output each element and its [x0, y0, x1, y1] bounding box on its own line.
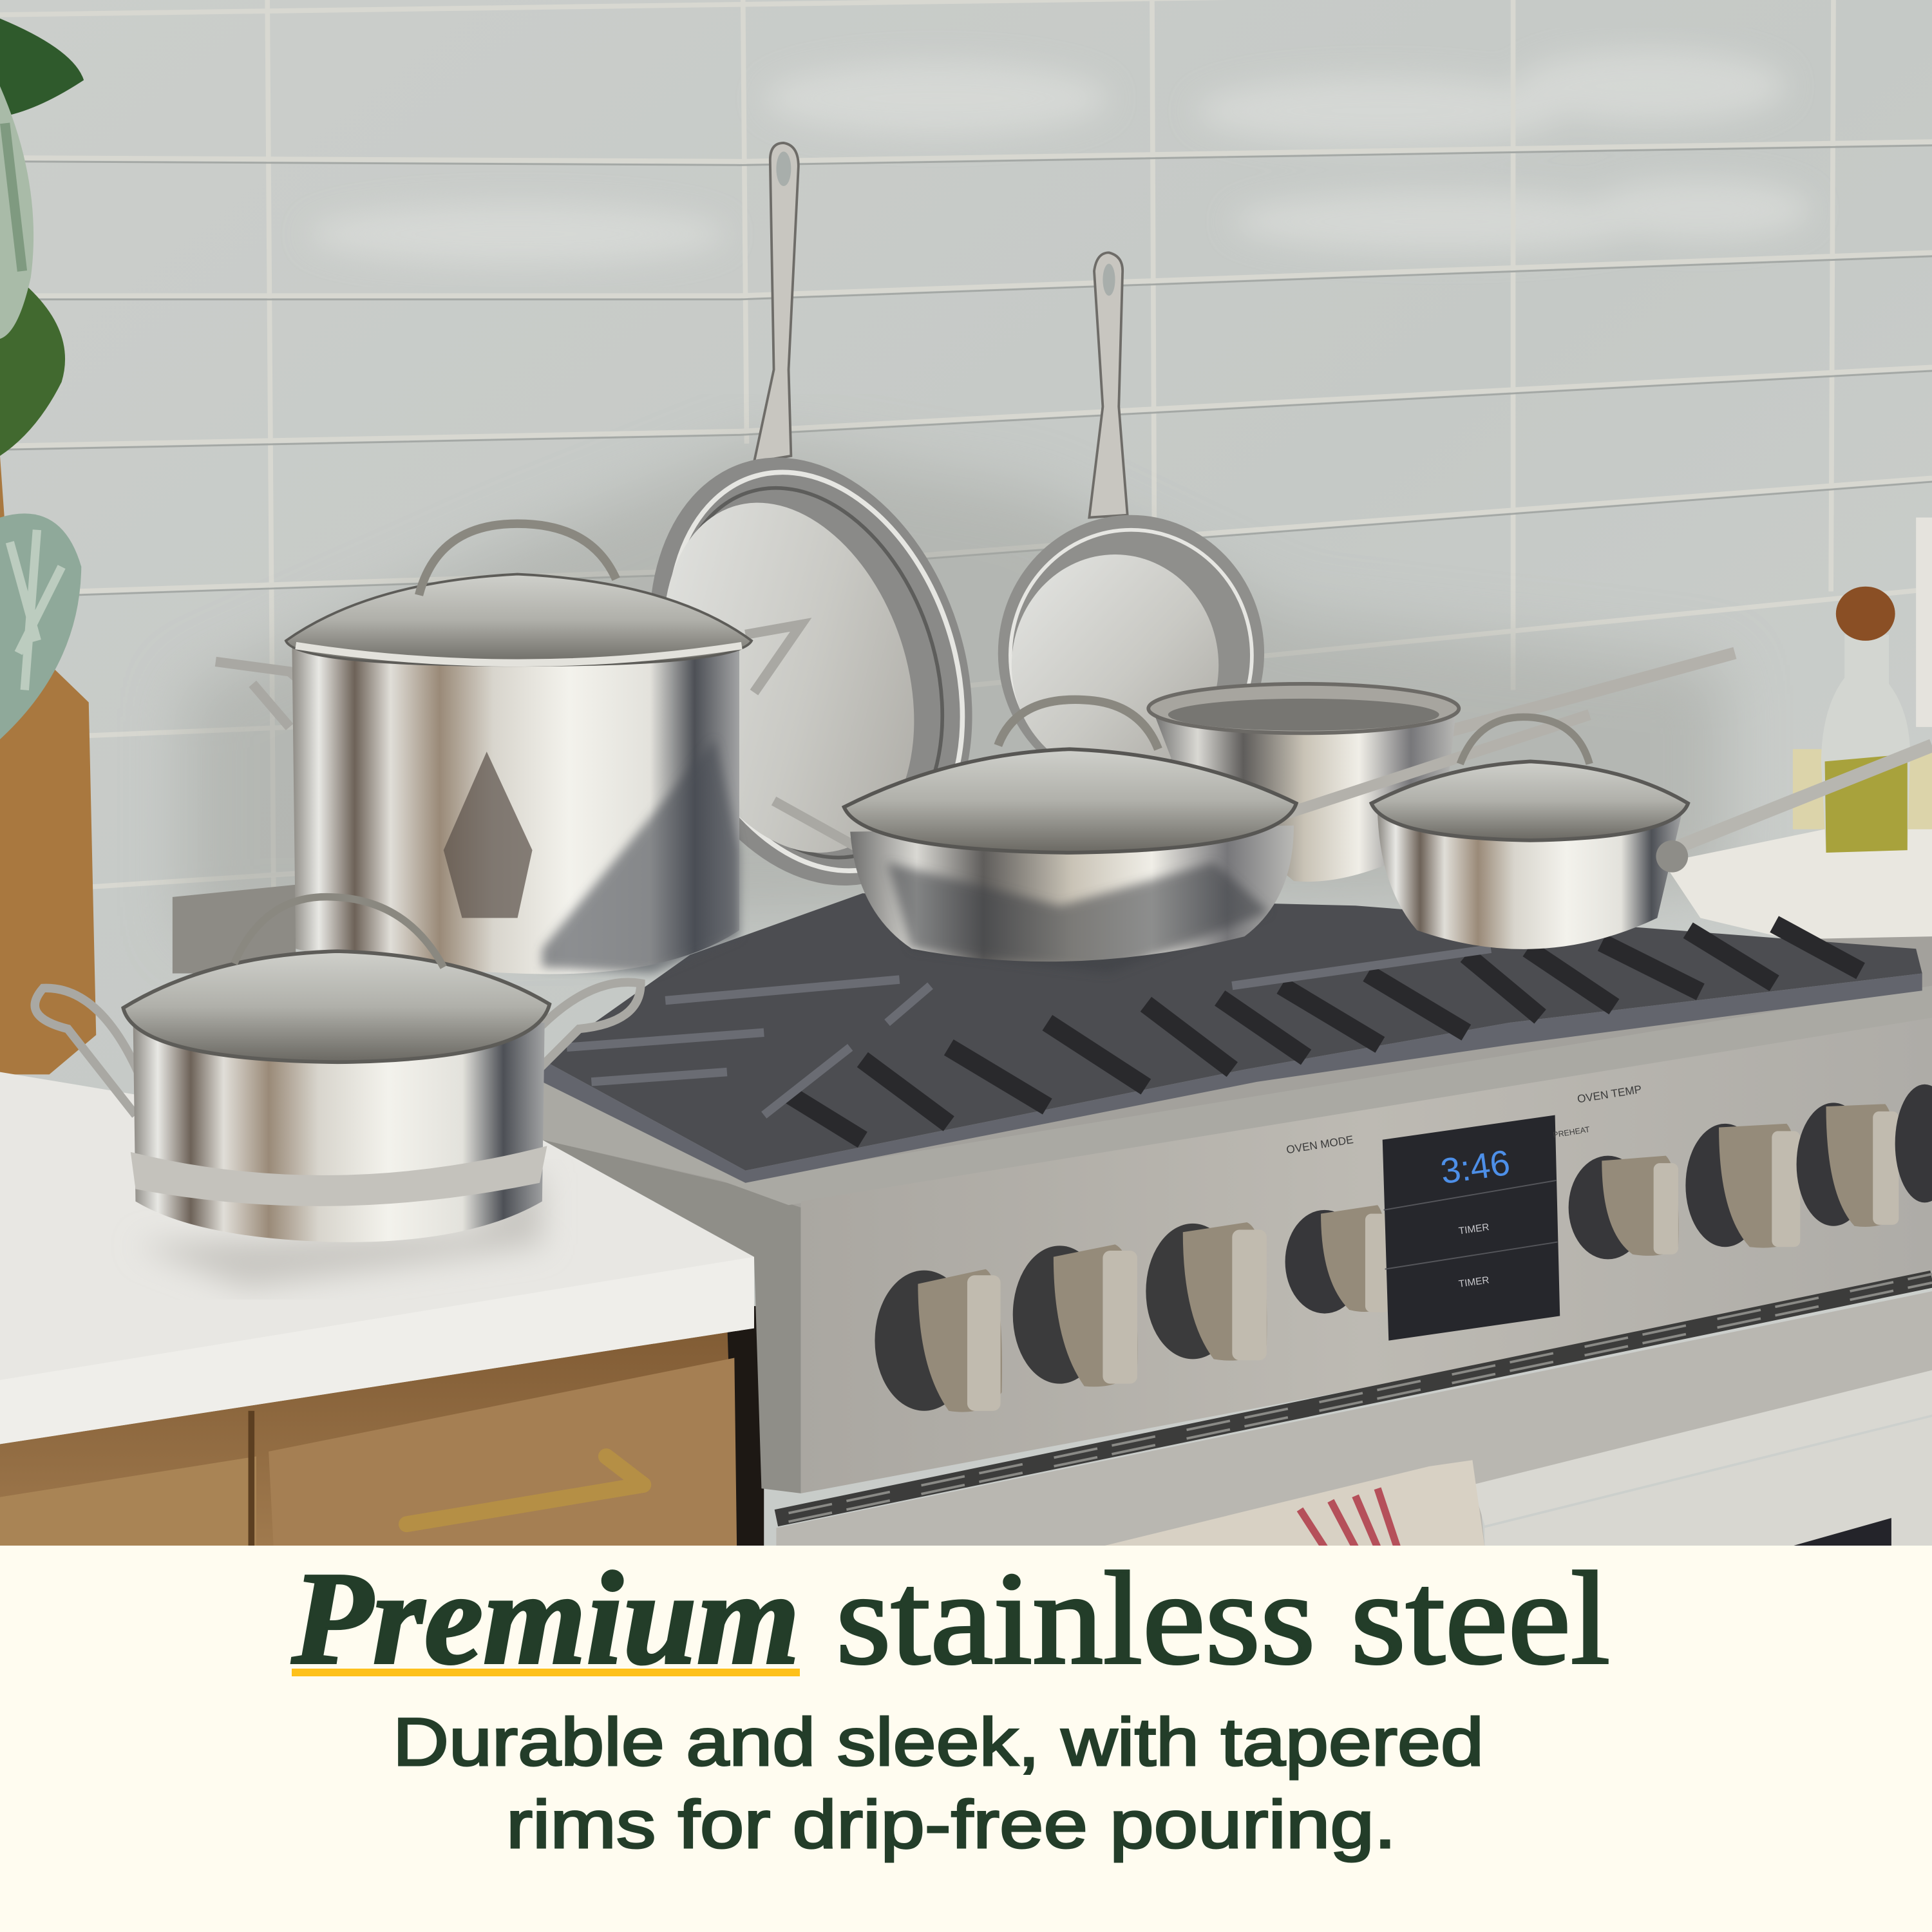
- panel labels: [1285, 1083, 1642, 1156]
- caption panel: [0, 1544, 1932, 1932]
- wooden cutting board: [0, 456, 96, 1074]
- digital display: 3:46: [1438, 1142, 1513, 1191]
- glossy tile highlights: [308, 50, 1812, 265]
- pot handles: [216, 625, 801, 746]
- right counter with oil bottle: [1663, 518, 1932, 974]
- knob 1: [875, 1269, 1002, 1412]
- oven door and window: [1485, 1417, 1932, 1548]
- cast iron grates: [542, 893, 1922, 1183]
- pot body: [133, 1023, 545, 1242]
- lid handle: [419, 524, 616, 595]
- plant leaves: [0, 19, 84, 739]
- oven control knobs: [875, 1084, 1932, 1412]
- subheading: rims for drip-free pouring.: [506, 1787, 1396, 1862]
- oil bottle: [1821, 587, 1910, 853]
- subheading: Durable and sleek, with tapered: [393, 1705, 1484, 1780]
- control panel: [801, 1018, 1932, 1493]
- saute pan with glass lid: [774, 699, 1589, 974]
- brass drawer handle: [406, 1457, 643, 1524]
- cooktop surface: [542, 936, 1932, 1208]
- knob 3: [1146, 1222, 1267, 1361]
- heading: stainless steel: [836, 1544, 1610, 1692]
- oven door handle: [1472, 1370, 1932, 1526]
- pot body: [292, 647, 739, 974]
- side handles: [35, 988, 138, 1115]
- digital display: TIMER: [1458, 1274, 1490, 1290]
- silver box behind pot: [173, 885, 296, 974]
- steamer pot on counter: [35, 897, 641, 1242]
- gas range: [542, 893, 1932, 1548]
- heading underline: [292, 1669, 800, 1676]
- back saucepan: [1148, 653, 1735, 882]
- large frying pan: [596, 143, 1025, 928]
- digital display: [1383, 1115, 1560, 1341]
- stove side trim: [542, 1084, 801, 1493]
- panel labels: OVEN MODE: [1285, 1133, 1354, 1156]
- knob 5: [1569, 1156, 1678, 1259]
- glass lid: [123, 951, 549, 1062]
- kitchen towel: [1097, 1460, 1485, 1548]
- stockpot with glass lid: [216, 524, 801, 974]
- heading: Premium: [291, 1544, 800, 1692]
- glass lid: [286, 574, 752, 665]
- cast shadows on wall: [185, 444, 1725, 936]
- cabinet with drawer: [0, 1306, 764, 1553]
- panel labels: PREHEAT: [1552, 1125, 1591, 1140]
- knob 2: [1013, 1244, 1137, 1387]
- subheading: [393, 1705, 1484, 1862]
- white countertop: [0, 1072, 754, 1444]
- knob 6: [1685, 1124, 1800, 1248]
- right saucepan with glass lid: [1372, 717, 1932, 949]
- panel labels: OVEN TEMP: [1577, 1083, 1642, 1106]
- vent strip: [776, 1274, 1932, 1522]
- knob 7: [1797, 1103, 1899, 1227]
- digital display: TIMER: [1458, 1222, 1490, 1236]
- knob 8: [1895, 1084, 1932, 1202]
- heading: [291, 1544, 1610, 1692]
- small frying pan: [998, 252, 1264, 791]
- knob 4: [1285, 1205, 1390, 1314]
